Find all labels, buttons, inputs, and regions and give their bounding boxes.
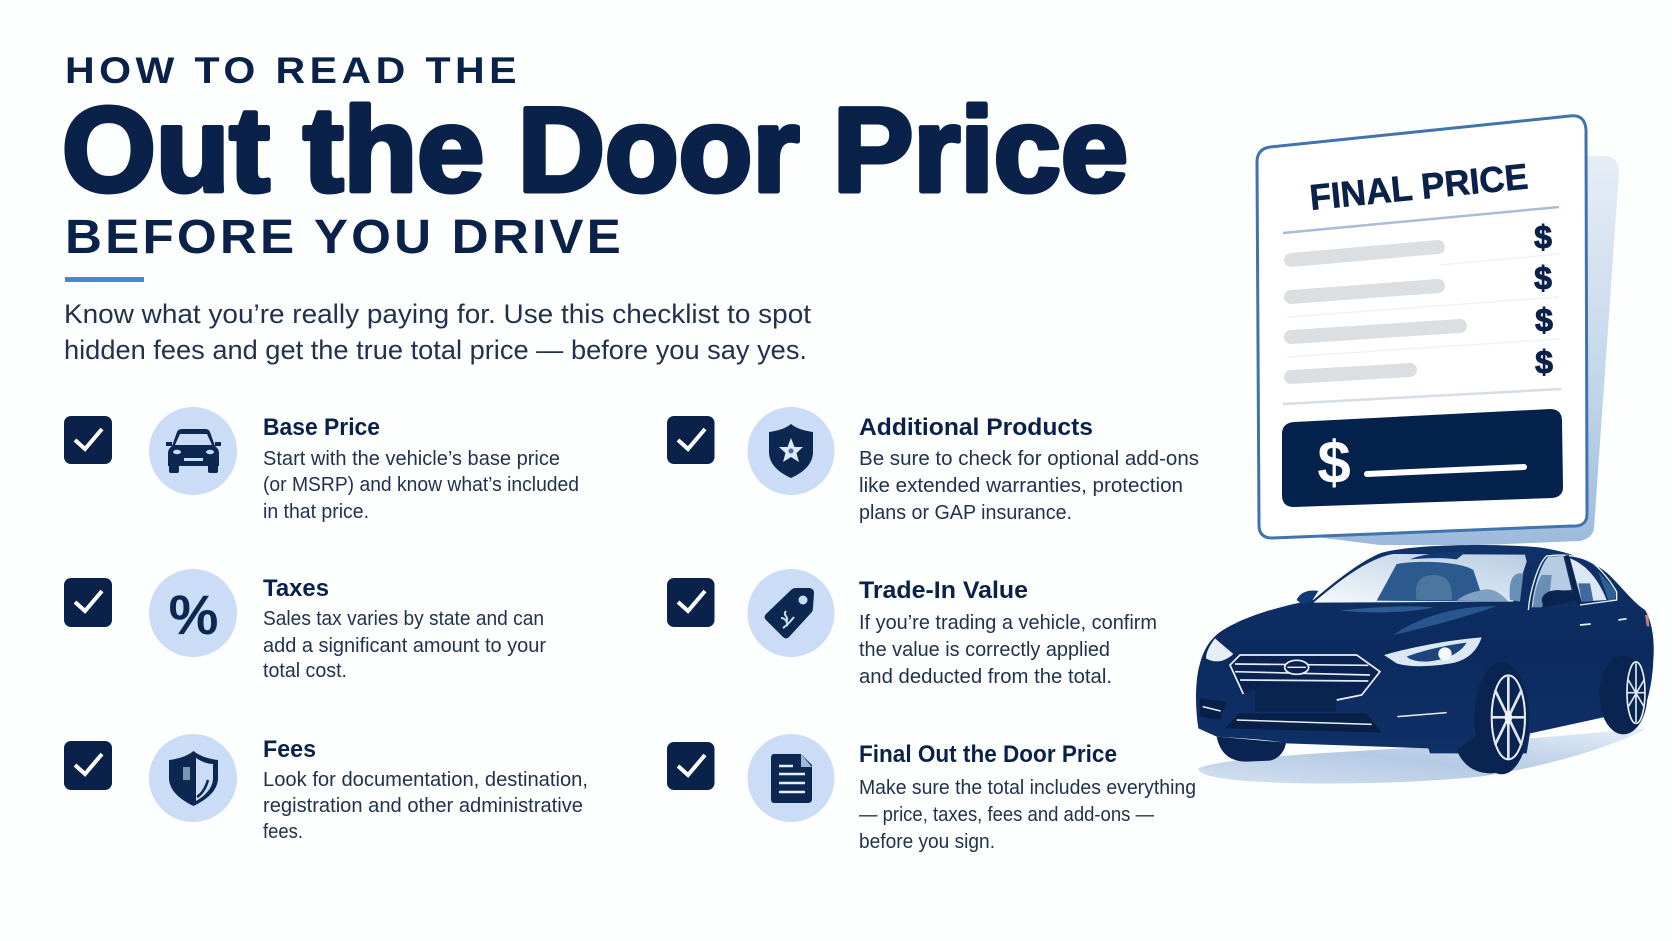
headlights <box>1206 637 1482 666</box>
description: like extended warranties, protection <box>859 474 1183 497</box>
checkbox <box>667 578 714 627</box>
front sheet <box>1257 116 1587 538</box>
description <box>263 607 546 682</box>
door handles <box>1580 619 1627 625</box>
heading: Fees <box>263 736 316 763</box>
accent bar <box>65 277 144 282</box>
dollar amounts: $ <box>1535 344 1553 380</box>
back sheet <box>1300 156 1619 545</box>
description: Make sure the total includes everything <box>859 776 1196 799</box>
checkbox <box>64 416 112 464</box>
checkbox <box>667 416 714 464</box>
dollar amounts: $ <box>1534 260 1552 296</box>
item: additional products <box>667 407 1199 524</box>
checkbox <box>667 742 714 790</box>
item: base price <box>64 407 579 523</box>
description: before you sign. <box>859 830 995 853</box>
description: Look for documentation, destination, <box>263 768 588 791</box>
eyebrow heading: HOW TO READ THE <box>65 50 521 91</box>
heading: Base Price <box>263 414 380 441</box>
checkbox <box>64 741 112 790</box>
rear wheel <box>1599 656 1647 734</box>
dollar amounts <box>1534 219 1553 380</box>
description: and deducted from the total. <box>859 665 1112 688</box>
lower intake <box>1200 698 1447 733</box>
icon: star shield <box>748 407 834 495</box>
icon: car <box>149 407 237 495</box>
total amount: $ <box>1317 429 1351 496</box>
car illustration <box>1196 545 1654 784</box>
heading: Trade-In Value <box>859 577 1028 604</box>
checkbox <box>64 578 112 627</box>
front left tire <box>1217 737 1286 762</box>
sub heading: BEFORE YOU DRIVE <box>65 211 624 264</box>
final price document <box>1257 116 1619 545</box>
sheet heading: FINAL PRICE <box>1308 155 1530 218</box>
description: total cost. <box>263 659 347 682</box>
item: taxes <box>64 569 546 682</box>
item: trade-in value <box>667 569 1157 688</box>
plate <box>1255 690 1336 712</box>
side windows <box>1528 555 1617 610</box>
description <box>263 768 588 843</box>
ground shadow <box>1198 728 1647 784</box>
rule lines <box>1283 207 1559 233</box>
intro text <box>64 299 812 365</box>
description <box>859 611 1157 688</box>
hood highlights <box>1340 606 1433 612</box>
title block <box>62 50 1128 264</box>
description: in that price. <box>263 500 369 523</box>
icon: percent <box>149 569 237 657</box>
description: plans or GAP insurance. <box>859 501 1072 524</box>
dollar amounts: $ <box>1535 302 1553 338</box>
item: final out the door price <box>667 734 1196 853</box>
description: the value is correctly applied <box>859 638 1110 661</box>
line items <box>1291 247 1460 377</box>
total box <box>1282 409 1563 507</box>
description <box>859 447 1199 524</box>
tail light <box>1645 615 1649 627</box>
description: — price, taxes, fees and add-ons — <box>859 803 1154 826</box>
heading: Taxes <box>263 575 329 602</box>
main title: Out the Door Price <box>62 83 1128 217</box>
description: (or MSRP) and know what’s included <box>263 473 579 496</box>
dollar amounts: $ <box>1534 219 1552 255</box>
car body <box>1196 545 1654 753</box>
description: If you’re trading a vehicle, confirm <box>859 611 1157 634</box>
description: fees. <box>263 820 303 843</box>
description <box>263 447 579 523</box>
front wheel <box>1457 662 1529 774</box>
heading: Additional Products <box>859 414 1093 441</box>
heading: Final Out the Door Price <box>859 741 1117 768</box>
description: Sales tax varies by state and can <box>263 607 544 630</box>
icon: price tag <box>748 569 834 657</box>
windshield <box>1313 552 1527 603</box>
description: registration and other administrative <box>263 794 583 817</box>
description: Start with the vehicle’s base price <box>263 447 560 470</box>
intro text: hidden fees and get the true total price — before you say yes. <box>64 335 807 365</box>
icon: document <box>748 734 834 822</box>
item: fees <box>64 734 588 843</box>
intro text: Know what you’re really paying for. Use this checklist to spot <box>64 299 812 329</box>
mirrors <box>1542 590 1578 607</box>
icon: shield <box>149 734 237 822</box>
description: add a significant amount to your <box>263 634 546 657</box>
grille <box>1230 655 1380 700</box>
description: Be sure to check for optional add-ons <box>859 447 1199 470</box>
description <box>859 776 1196 853</box>
icon: percent: % <box>169 583 218 646</box>
